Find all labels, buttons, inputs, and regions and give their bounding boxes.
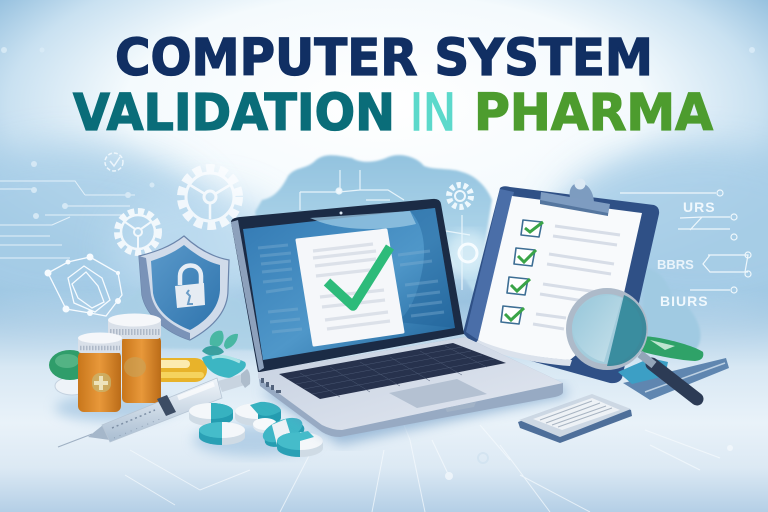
small gear between laptop and clipboard: [449, 185, 471, 207]
handheld device: [518, 394, 632, 443]
pill 5: [259, 413, 308, 452]
green check mark: [327, 247, 390, 306]
gear icon: small: [118, 212, 158, 252]
circuit labels: right side: [620, 190, 751, 309]
pill 6: [277, 431, 323, 457]
checklist item 1: [521, 220, 543, 237]
circuit network over cloud: [300, 170, 470, 290]
label: BBRS: BBRS: [657, 257, 694, 272]
pill 4: [253, 418, 277, 433]
laptop: [231, 199, 570, 445]
soft shadow under medicines: [55, 394, 317, 456]
laptop lid: [231, 199, 464, 372]
laptop base: [258, 337, 563, 437]
gear icon: large: [182, 169, 238, 225]
syringe: [58, 369, 250, 447]
glow ring between laptop and clipboard: [446, 231, 490, 275]
title line 2: IN: [410, 84, 456, 143]
clipboard paper: [478, 196, 642, 360]
title line 1: COMPUTER SYSTEM: [115, 29, 653, 88]
label: URS top: URS: [683, 199, 716, 215]
yellow capsule: [150, 358, 207, 382]
floor circuit pattern: [125, 415, 732, 512]
clipboard: [463, 178, 659, 383]
cloud blobs behind devices: [112, 155, 701, 352]
icon: padlock: [175, 266, 205, 308]
bottle left: [78, 332, 122, 412]
checklist item 2: [514, 248, 536, 266]
pills back group: [49, 350, 207, 395]
checklist item 4: [501, 306, 524, 324]
pill 3: [235, 402, 281, 426]
screen side text blocks: [258, 245, 444, 332]
keyboard: [279, 343, 506, 399]
book under pills: [623, 358, 729, 400]
clipboard board: [463, 186, 659, 383]
bottle right: [108, 314, 161, 403]
small check badge: [105, 153, 123, 171]
title line 2: VALIDATION: [73, 84, 395, 143]
pill 2: [199, 422, 245, 445]
pill 1: [189, 403, 233, 426]
title line 2: [73, 84, 714, 143]
title line 2: PHARMA: [474, 84, 714, 143]
green pill right: [618, 336, 703, 384]
clipboard clip: [540, 178, 610, 216]
shadow: [260, 385, 570, 445]
pills front group: [189, 402, 323, 457]
green tablet: [49, 350, 91, 395]
laptop screen: [243, 208, 455, 360]
molecule network: [44, 254, 122, 316]
trackpad: [389, 379, 487, 408]
label: SIURS: BIURS: [660, 293, 709, 309]
circuit lines: left: [0, 47, 755, 258]
small plant: [202, 331, 238, 356]
checklist text lines: [533, 226, 620, 329]
title: [73, 29, 714, 143]
checklist item 3: [507, 277, 530, 295]
icon: shield with lock: [139, 236, 229, 340]
medicine bottles: [78, 314, 161, 412]
document on screen: [297, 230, 403, 345]
teal pills behind laptop: [202, 355, 246, 378]
magnifying glass: [569, 291, 697, 399]
